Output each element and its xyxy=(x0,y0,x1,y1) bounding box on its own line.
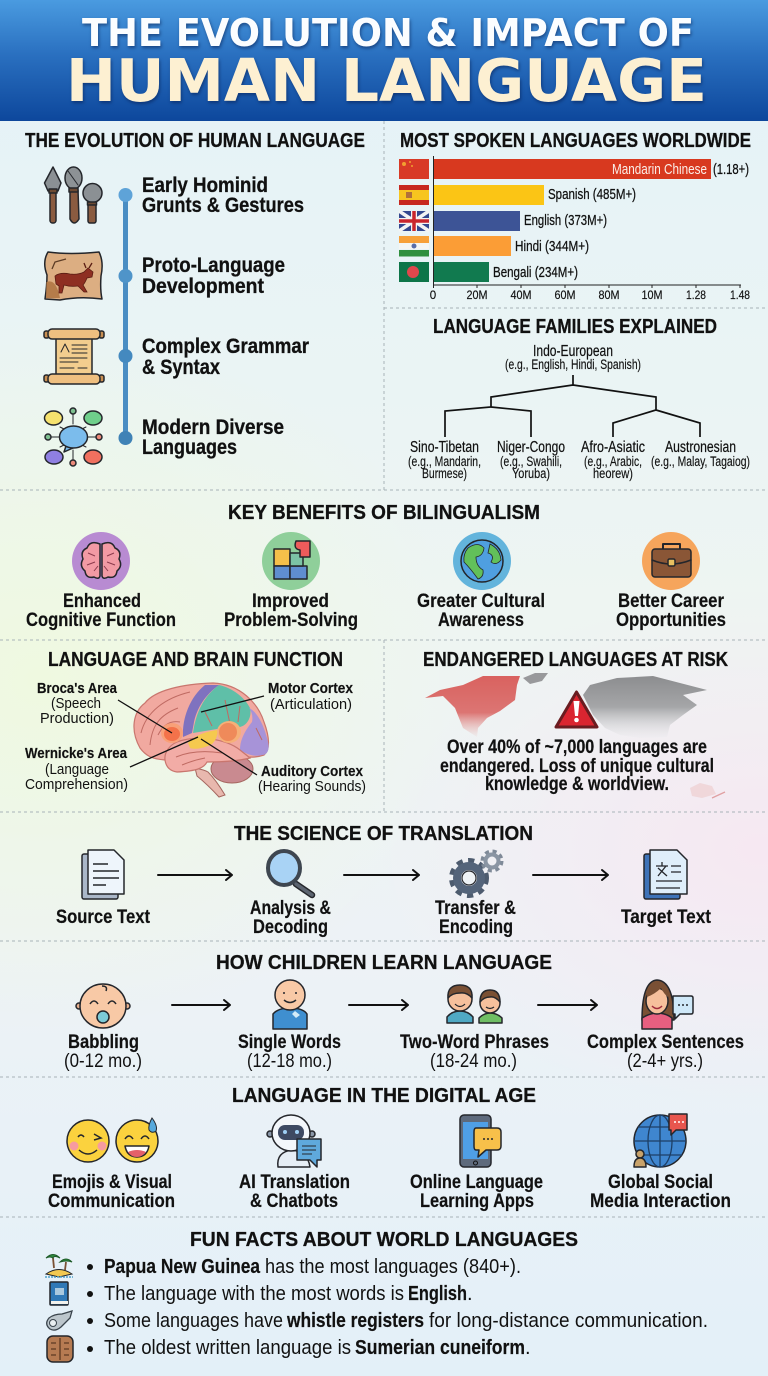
bar labels: (1.18+) xyxy=(713,162,749,178)
step: analysis and decoding: Decoding xyxy=(253,917,328,938)
item: social media: Global Social xyxy=(608,1172,713,1193)
timeline labels: Proto-Language xyxy=(142,254,285,277)
item: AI chatbots: & Chatbots xyxy=(250,1191,338,1212)
panel: digital age xyxy=(48,1084,731,1212)
icon: island xyxy=(45,1254,73,1277)
step: analysis and decoding xyxy=(250,851,331,938)
panel: bilingualism benefits xyxy=(26,501,726,631)
step: target text xyxy=(621,850,712,928)
family: Sino-Tibetan: Sino-Tibetan xyxy=(410,439,479,456)
family: Sino-Tibetan xyxy=(408,439,481,481)
item: emojis: Communication xyxy=(48,1191,175,1212)
fact two: English xyxy=(408,1283,467,1305)
benefit: career opportunities: Better Career xyxy=(618,591,725,612)
fact four: The oldest written language is xyxy=(104,1337,351,1359)
endangered text: knowledge & worldview. xyxy=(485,774,669,795)
item: AI chatbots xyxy=(239,1115,350,1212)
bar labels: Hindi (344M+) xyxy=(515,239,589,255)
callout: motor cortex xyxy=(268,681,353,713)
fact four xyxy=(87,1337,531,1359)
endangered text xyxy=(440,737,714,795)
axis tick labels xyxy=(430,290,750,302)
callout: auditory cortex xyxy=(258,764,366,795)
callout: auditory cortex: Auditory Cortex xyxy=(261,764,363,780)
bar labels: Mandarin Chinese xyxy=(612,162,707,178)
callout: Wernicke's area: Wernicke's Area xyxy=(25,746,128,762)
benefit: career opportunities: Opportunities xyxy=(616,610,726,631)
root family label: (e.g., English, Hindi, Spanish) xyxy=(505,357,641,372)
item: AI chatbots: AI Translation xyxy=(239,1172,350,1193)
step: source text xyxy=(56,850,151,928)
fact two: . xyxy=(467,1283,473,1305)
bar labels xyxy=(493,162,749,281)
stage: single words: Single Words xyxy=(238,1032,341,1053)
item: social media xyxy=(590,1114,731,1212)
timeline labels: Early Hominid xyxy=(142,174,268,197)
timeline labels: Complex Grammar xyxy=(142,335,309,358)
family: Niger-Congo xyxy=(497,439,565,481)
icon: book xyxy=(50,1282,68,1305)
panel: most spoken languages xyxy=(399,129,751,302)
axis tick labels: 20M xyxy=(466,290,488,302)
root family label xyxy=(505,343,641,372)
timeline labels: & Syntax xyxy=(142,356,220,379)
family: Austronesian: Austronesian xyxy=(665,439,736,456)
axis tick labels: 0 xyxy=(430,290,436,302)
fact two: The language with the most words is xyxy=(104,1283,404,1305)
heading: language families: LANGUAGE FAMILIES EXPLAINED xyxy=(433,315,717,338)
family: Afro-Asiatic xyxy=(581,439,645,481)
family tree lines xyxy=(445,375,700,437)
stage: complex sentences: (2-4+ yrs.) xyxy=(627,1051,703,1072)
arrow xyxy=(172,1000,230,1010)
callout: Broca's area: (Speech xyxy=(51,695,101,712)
timeline line and dots xyxy=(118,188,132,445)
bar chart xyxy=(433,156,741,288)
axis tick labels: 1.48 xyxy=(730,290,750,302)
callout: Wernicke's area xyxy=(25,746,128,793)
benefit: cognitive function: Cognitive Function xyxy=(26,610,176,631)
panel: how children learn xyxy=(64,951,744,1072)
family: Sino-Tibetan: Burmese) xyxy=(422,466,467,481)
world map xyxy=(425,673,725,798)
bar labels: English (373M+) xyxy=(524,213,607,229)
icon: clay tablet xyxy=(47,1336,73,1362)
family: Niger-Congo: Niger-Congo xyxy=(497,439,565,456)
benefit: cultural awareness: Awareness xyxy=(438,610,524,631)
step: transfer and encoding: Transfer & xyxy=(435,898,516,919)
brain callout lines xyxy=(118,696,264,775)
fact four: Sumerian cuneiform xyxy=(355,1337,525,1359)
benefit: problem solving: Improved xyxy=(252,591,329,612)
stage: single words: (12-18 mo.) xyxy=(247,1051,332,1072)
icon: stone tools xyxy=(44,167,102,223)
header banner xyxy=(0,0,768,121)
fact three: for long-distance communication. xyxy=(429,1310,708,1332)
axis tick labels: 10M xyxy=(642,290,662,302)
callout: motor cortex: Motor Cortex xyxy=(268,681,353,697)
family: Austronesian xyxy=(651,439,750,469)
arrow xyxy=(158,870,232,880)
icon: whistle xyxy=(47,1311,72,1330)
callout: Broca's area: Production) xyxy=(40,710,114,727)
stage: complex sentences xyxy=(587,980,744,1072)
fact three xyxy=(87,1310,708,1332)
benefit: problem solving: Problem-Solving xyxy=(224,610,358,631)
heading: evolution: THE EVOLUTION OF HUMAN LANGUAGE xyxy=(25,129,365,152)
stage: babbling: (0-12 mo.) xyxy=(64,1051,142,1072)
family: Niger-Congo: (e.g., Swahili, xyxy=(500,454,562,469)
panel: evolution timeline xyxy=(25,129,365,466)
endangered text: Over 40% of ~7,000 languages are xyxy=(447,737,707,758)
step: analysis and decoding: Analysis & xyxy=(250,898,331,919)
family: Afro-Asiatic: Afro-Asiatic xyxy=(581,439,645,456)
title line two: HUMAN LANGUAGE xyxy=(66,46,707,115)
item: emojis xyxy=(48,1118,175,1212)
stage: babbling xyxy=(64,984,142,1072)
benefit: career opportunities xyxy=(616,532,726,631)
stage: two-word phrases: (18-24 mo.) xyxy=(430,1051,517,1072)
fact one: has the most languages (840+). xyxy=(265,1256,521,1278)
fact one: Papua New Guinea xyxy=(104,1256,261,1278)
heading: brain: LANGUAGE AND BRAIN FUNCTION xyxy=(48,648,343,671)
icon: modern speech network xyxy=(44,408,102,466)
item: language apps xyxy=(410,1115,543,1212)
callout: Broca's area: Broca's Area xyxy=(37,681,118,697)
fact three: whistle registers xyxy=(286,1310,424,1332)
family: Niger-Congo: Yoruba) xyxy=(512,466,550,481)
benefit: cognitive function xyxy=(26,532,176,631)
stage: single words xyxy=(238,980,341,1072)
axis tick labels: 1.28 xyxy=(686,290,706,302)
stage: two-word phrases: Two-Word Phrases xyxy=(400,1032,549,1053)
timeline labels: Development xyxy=(142,275,264,298)
family: Afro-Asiatic: heorew) xyxy=(593,466,633,481)
axis tick labels: 40M xyxy=(510,290,532,302)
heading: children: HOW CHILDREN LEARN LANGUAGE xyxy=(216,951,552,974)
step: transfer and encoding: Encoding xyxy=(439,917,513,938)
heading: translation: THE SCIENCE OF TRANSLATION xyxy=(234,822,533,845)
stage: complex sentences: Complex Sentences xyxy=(587,1032,744,1053)
root family label: Indo-European xyxy=(533,343,613,360)
stage: babbling: Babbling xyxy=(68,1032,139,1053)
family: Sino-Tibetan: (e.g., Mandarin, xyxy=(408,454,481,469)
icon: warning triangle xyxy=(556,692,597,727)
timeline labels: Grunts & Gestures xyxy=(142,194,304,217)
callout: Wernicke's area: (Language xyxy=(45,761,109,778)
panel: language and brain function xyxy=(25,648,366,797)
bar labels: Spanish (485M+) xyxy=(548,187,636,203)
title line one: THE EVOLUTION & IMPACT OF xyxy=(82,11,694,55)
benefit: cognitive function: Enhanced xyxy=(63,591,141,612)
step: target text: Target Text xyxy=(621,907,712,928)
arrow xyxy=(533,870,608,880)
step: transfer and encoding xyxy=(435,852,516,938)
callout: Wernicke's area: Comprehension) xyxy=(25,776,128,793)
axis tick labels: 80M xyxy=(598,290,620,302)
bar labels: Bengali (234M+) xyxy=(493,265,578,281)
panel: language families xyxy=(408,315,750,481)
endangered text: endangered. Loss of unique cultural xyxy=(440,756,714,777)
item: social media: Media Interaction xyxy=(590,1191,731,1212)
family: Afro-Asiatic: (e.g., Arabic, xyxy=(584,454,642,469)
flags xyxy=(399,159,429,282)
benefit: cultural awareness xyxy=(417,532,545,631)
step: source text: Source Text xyxy=(56,907,151,928)
callout: auditory cortex: (Hearing Sounds) xyxy=(258,778,366,795)
fact one xyxy=(87,1256,521,1278)
panel: endangered languages xyxy=(423,648,728,798)
panel: science of translation xyxy=(56,822,712,938)
item: language apps: Online Language xyxy=(410,1172,543,1193)
icon: cave painting xyxy=(45,252,102,300)
item: emojis: Emojis & Visual xyxy=(52,1172,172,1193)
arrow xyxy=(349,1000,408,1010)
arrow xyxy=(344,870,419,880)
stage: two-word phrases xyxy=(400,985,549,1072)
heading: fun facts: FUN FACTS ABOUT WORLD LANGUAGES xyxy=(190,1228,578,1251)
timeline labels xyxy=(142,174,309,459)
benefit: cultural awareness: Greater Cultural xyxy=(417,591,545,612)
fact four: . xyxy=(525,1337,531,1359)
heading: digital age: LANGUAGE IN THE DIGITAL AGE xyxy=(232,1084,536,1107)
callout: Broca's area xyxy=(37,681,118,727)
heading: benefits: KEY BENEFITS OF BILINGUALISM xyxy=(228,501,540,524)
axis tick labels: 60M xyxy=(554,290,576,302)
timeline labels: Modern Diverse xyxy=(142,416,284,439)
item: language apps: Learning Apps xyxy=(420,1191,534,1212)
timeline labels: Languages xyxy=(142,436,237,459)
panel: fun facts xyxy=(45,1228,708,1362)
benefit: problem solving xyxy=(224,532,358,631)
brain diagram xyxy=(134,683,269,797)
arrow xyxy=(538,1000,597,1010)
icon: ancient scroll xyxy=(44,329,104,384)
fact three: Some languages have xyxy=(104,1310,283,1332)
callout: motor cortex: (Articulation) xyxy=(270,696,352,713)
